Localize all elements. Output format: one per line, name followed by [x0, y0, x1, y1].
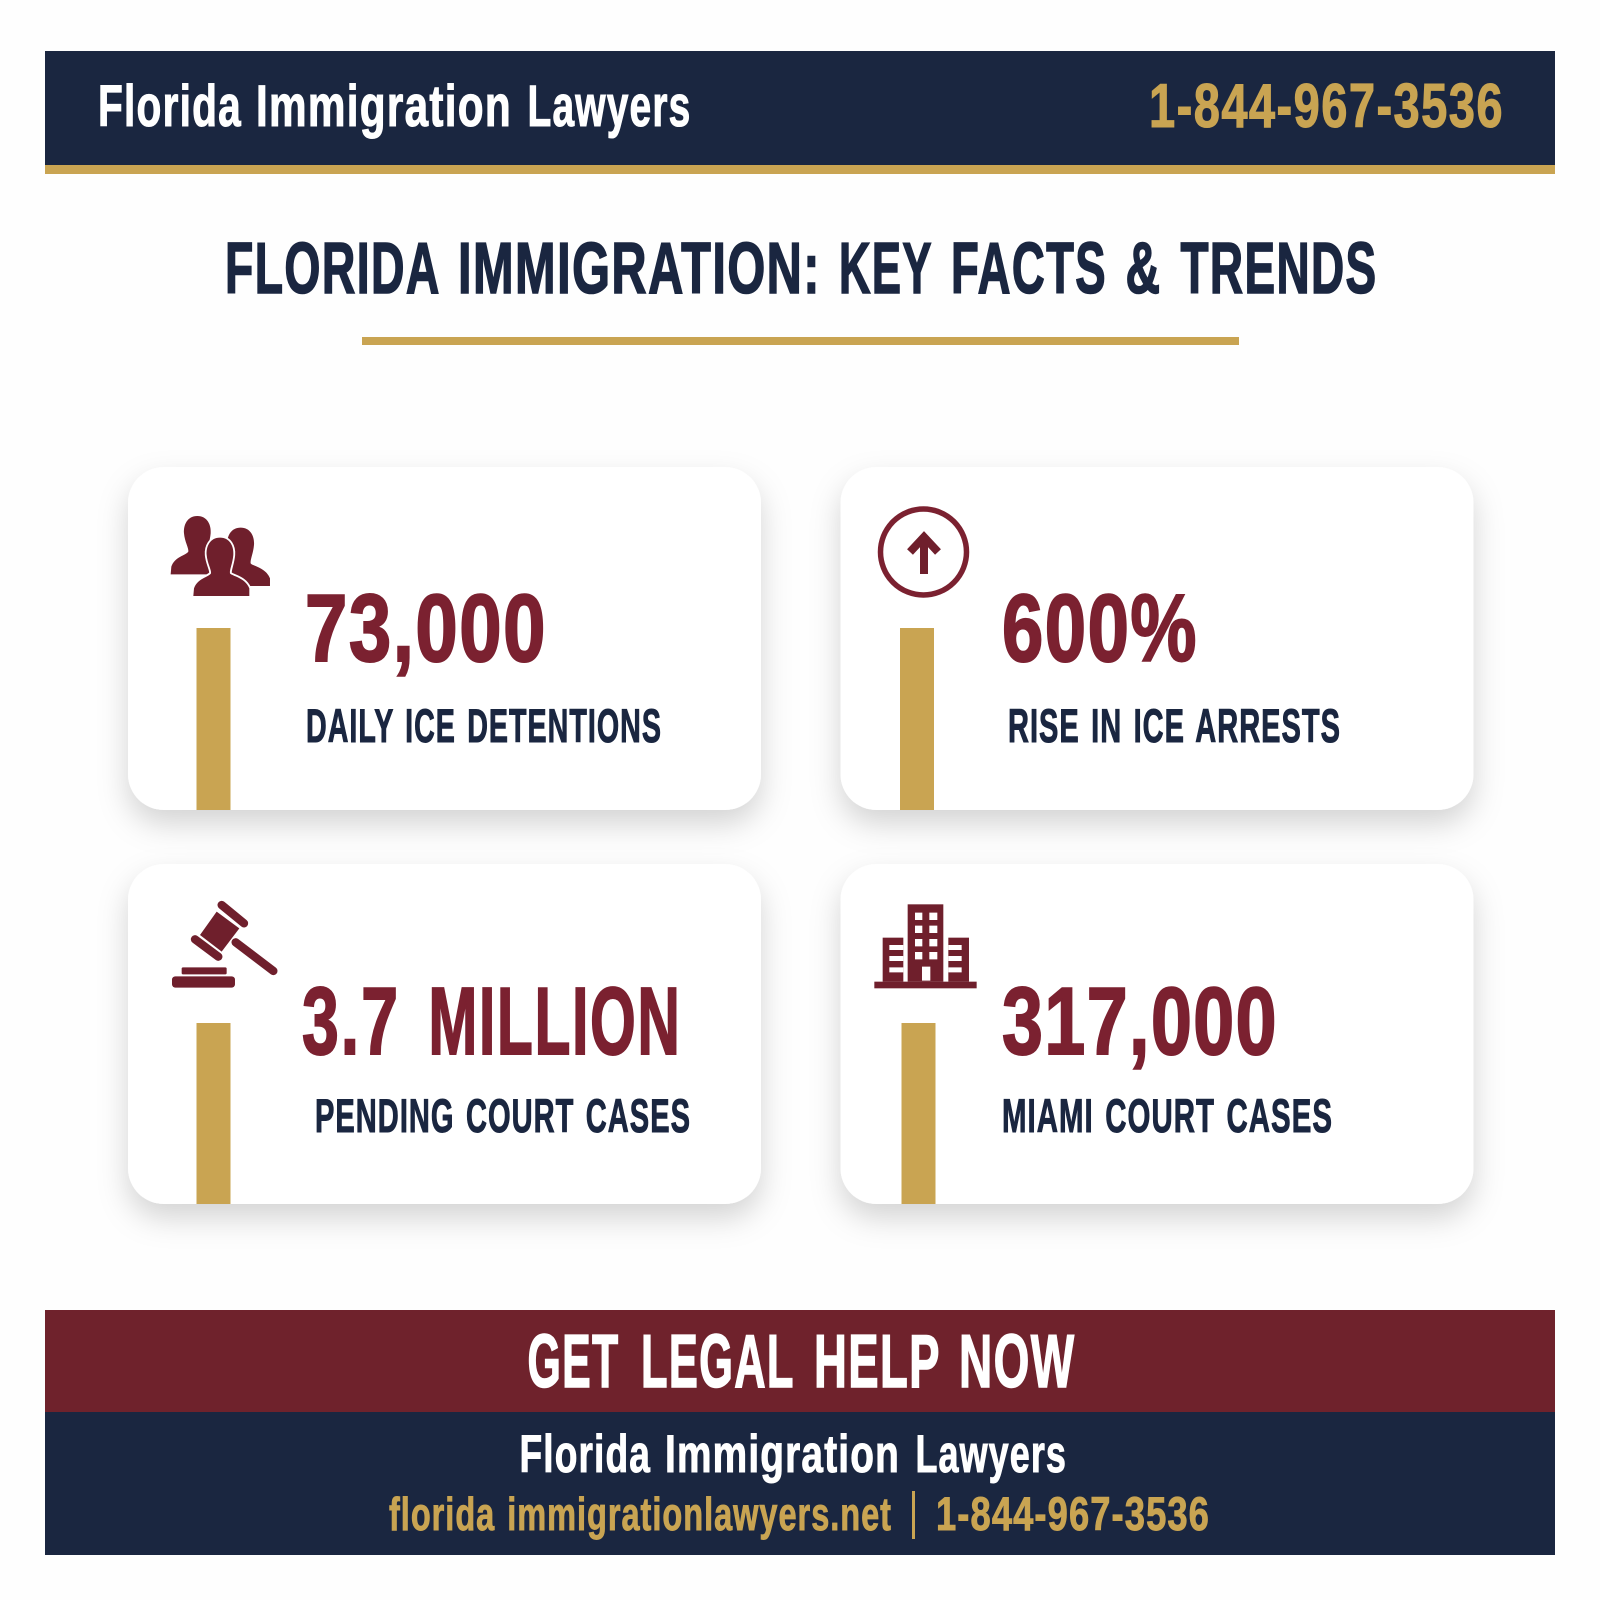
title: IMMIGRATION:: [458, 229, 821, 309]
panel: Miami court cases: [840, 864, 1474, 1204]
icon: gavel: [172, 905, 273, 988]
call to action text: HELP: [814, 1319, 940, 1403]
stat value: 73,000: [305, 575, 547, 682]
header firm name: Lawyers: [528, 74, 692, 139]
stat label: DAILY ICE DETENTIONS: [306, 699, 662, 752]
title: FACTS: [951, 229, 1107, 309]
call to action text: GET: [528, 1319, 620, 1403]
title: TRENDS: [1180, 229, 1378, 309]
stat value: 600%: [1002, 575, 1198, 682]
title underline: [362, 337, 1239, 345]
header bar: [45, 51, 1555, 174]
icon: up arrow in circle: [880, 509, 966, 595]
stat label: RISE IN ICE ARRESTS: [1008, 699, 1341, 752]
footer phone number: 1-844-967-3536: [936, 1487, 1210, 1540]
stat value: 317,000: [1002, 968, 1278, 1075]
footer separator: [912, 1491, 915, 1539]
gold bar: [196, 628, 230, 810]
panel: pending court cases: [128, 864, 761, 1204]
footer firm name: Florida: [520, 1425, 651, 1484]
call to action banner: [45, 1310, 1555, 1412]
stat value: 3.7: [302, 968, 400, 1075]
gold bar: [196, 1023, 230, 1204]
header firm name: Florida: [98, 74, 242, 139]
header firm name: Immigration: [256, 74, 512, 139]
call to action text: LEGAL: [641, 1319, 794, 1403]
stat label: PENDING COURT CASES: [315, 1089, 691, 1142]
footer firm name: Immigration: [665, 1425, 900, 1484]
panel: daily ICE detentions: [128, 467, 761, 810]
title: &: [1126, 229, 1162, 309]
title: FLORIDA: [225, 229, 439, 309]
panel: rise in ICE arrests: [840, 467, 1474, 810]
icon: people: [171, 516, 270, 596]
gold bar: [902, 1023, 936, 1204]
stat label: MIAMI COURT CASES: [1002, 1089, 1333, 1142]
footer firm name: Lawyers: [916, 1425, 1067, 1484]
title: KEY: [839, 229, 932, 309]
call to action text: NOW: [959, 1319, 1076, 1403]
gold bar: [900, 628, 934, 810]
footer contact panel: [45, 1412, 1555, 1555]
icon: building: [874, 904, 977, 988]
stat value: MILLION: [428, 968, 682, 1075]
footer website: florida immigrationlawyers.net: [389, 1488, 892, 1540]
